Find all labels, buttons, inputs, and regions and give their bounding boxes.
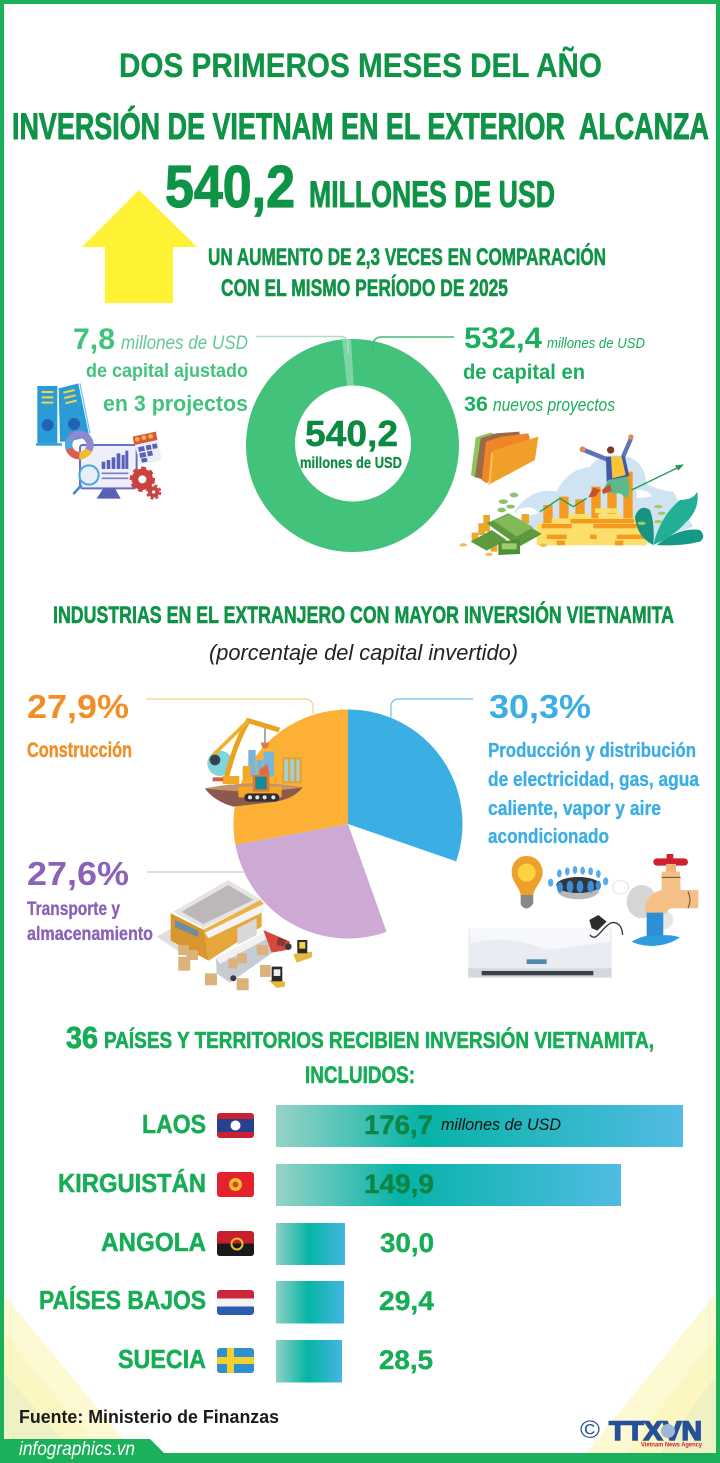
flag: Sweden	[217, 1348, 254, 1373]
energy label: acondicionado	[488, 826, 609, 848]
leader line: construction	[146, 699, 313, 714]
bar row: Países Bajos: PAÍSES BAJOS	[39, 1286, 206, 1315]
bar row: Kirguistán: 149,9	[364, 1169, 434, 1199]
headline value: 540,2	[165, 154, 295, 220]
icon: light bulb, burner, tap and air conditioner	[468, 854, 698, 978]
leader line: adjusted capital	[256, 336, 348, 353]
decorative corner triangles	[4, 1293, 716, 1453]
bar row: Angola	[101, 1223, 434, 1265]
agency logo	[580, 1416, 702, 1448]
bar row: Kirguistán	[58, 1164, 621, 1206]
icon: warehouse, truck and forklifts	[157, 880, 312, 990]
footer tab: infographics.vn	[19, 1439, 135, 1460]
bar row: Laos: LAOS	[142, 1111, 206, 1139]
flag: Angola	[217, 1231, 254, 1256]
leader line: new capital	[373, 337, 454, 354]
construction label	[27, 688, 132, 762]
bar row: Laos: 176,7	[364, 1110, 433, 1140]
flag: Netherlands	[217, 1290, 254, 1315]
energy label	[488, 688, 700, 848]
bar row: Laos: millones de USD	[441, 1115, 561, 1134]
bar row: Laos	[142, 1105, 683, 1147]
bar row: Suecia: SUECIA	[118, 1346, 206, 1374]
icon: folders, money and growth illustration	[460, 432, 703, 556]
section heading: countries: 36	[66, 1020, 98, 1055]
icon: yellow up arrow	[82, 190, 197, 303]
flag: Laos	[217, 1113, 254, 1138]
transport label: Transporte y	[27, 899, 120, 920]
icon: excavator and city	[205, 721, 303, 807]
transport label	[27, 855, 153, 945]
footer tab	[0, 1439, 164, 1463]
adjusted capital callout: de capital ajustado	[86, 360, 248, 382]
bar row: Países Bajos: 29,4	[379, 1286, 434, 1316]
growth text line 2: CON EL MISMO PERÍODO DE 2025	[221, 274, 508, 302]
bar row: Kirguistán: KIRGUISTÁN	[58, 1169, 206, 1198]
section heading: countries	[66, 1020, 654, 1089]
new capital callout: de capital en	[463, 361, 585, 384]
adjusted capital callout: en 3 projectos	[103, 391, 248, 416]
new capital callout: nuevos proyectos	[493, 395, 615, 415]
icon: binders and analytics monitor	[36, 383, 162, 499]
construction label: 27,9%	[27, 688, 129, 725]
donut centre value: 540,2	[305, 413, 398, 454]
donut chart	[246, 339, 459, 552]
adjusted capital callout: 7,8	[73, 323, 115, 356]
construction label: Construcción	[27, 739, 132, 762]
new capital callout: 36	[464, 393, 488, 416]
new capital callout: 532,4	[464, 322, 542, 355]
transport label: 27,6%	[27, 855, 129, 892]
donut centre unit: millones de USD	[300, 455, 402, 472]
flag: Kyrgyzstan	[217, 1172, 254, 1197]
source note: Fuente: Ministerio de Finanzas	[19, 1407, 279, 1427]
section heading: countries: INCLUIDOS:	[305, 1062, 415, 1089]
headline unit: MILLONES DE USD	[309, 174, 555, 215]
agency logo: TTXVN	[609, 1416, 702, 1446]
new capital callout	[463, 322, 645, 416]
leader line: transport	[147, 871, 245, 873]
transport label: almacenamiento	[27, 924, 153, 945]
adjusted capital callout: millones de USD	[121, 333, 248, 354]
pie chart	[234, 710, 462, 938]
agency logo: ©	[580, 1416, 601, 1444]
agency logo: Vietnam News Agency	[641, 1442, 702, 1448]
adjusted capital callout	[73, 323, 248, 416]
energy label: 30,3%	[489, 688, 591, 725]
bar row: Angola: 30,0	[380, 1228, 434, 1258]
leader line: energy	[391, 699, 473, 718]
energy label: caliente, vapor y aire	[488, 798, 661, 820]
section subtitle: (porcentaje del capital invertido)	[209, 640, 518, 665]
bar row: Países Bajos	[39, 1281, 434, 1324]
new capital callout: millones de USD	[547, 335, 645, 352]
bar row: Suecia	[118, 1340, 433, 1382]
bar row: Angola: ANGOLA	[101, 1229, 206, 1257]
bar row: Suecia: 28,5	[379, 1345, 433, 1375]
title line 1: DOS PRIMEROS MESES DEL AÑO	[119, 46, 602, 85]
